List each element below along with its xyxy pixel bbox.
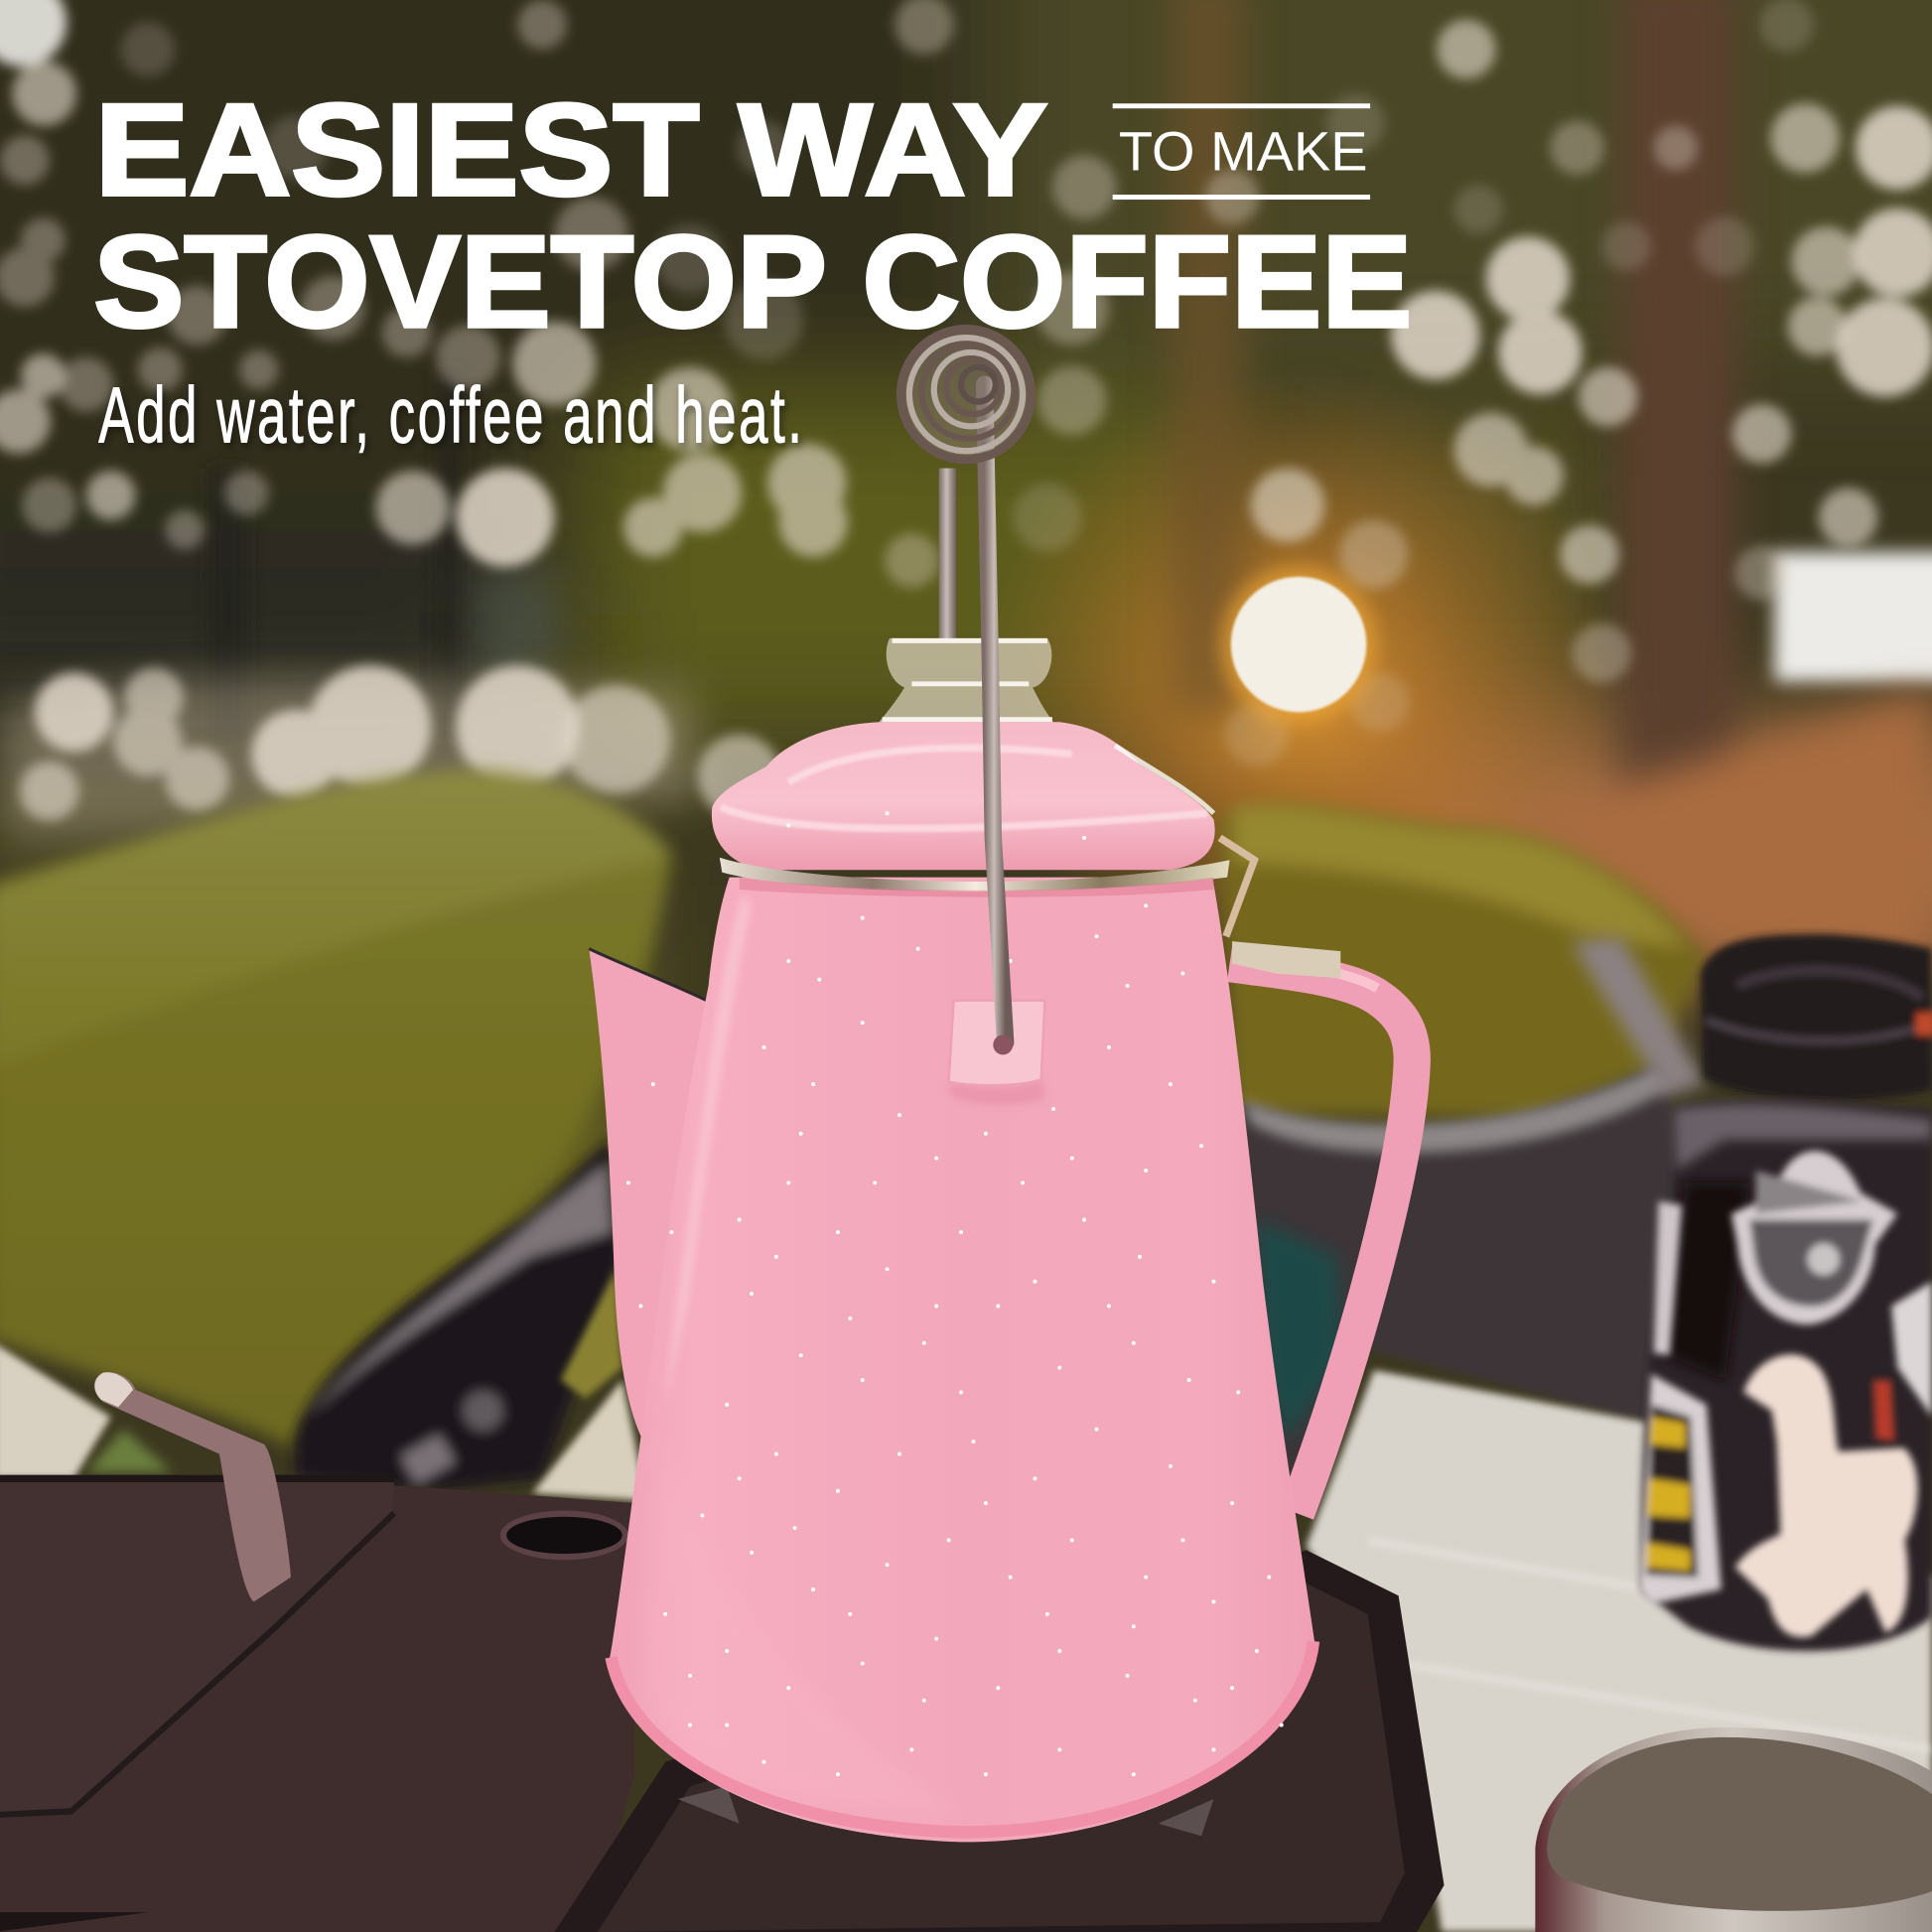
camp stove base xyxy=(0,1478,634,1932)
coffee percolator xyxy=(589,329,1412,1842)
bracket shadow xyxy=(949,1079,1044,1105)
table plank line xyxy=(1368,1540,1932,1749)
bottle lid xyxy=(1701,934,1932,1101)
to make tag: TO MAKE xyxy=(1119,119,1368,182)
dark bottle stripe xyxy=(1666,1182,1749,1380)
ground far right xyxy=(1528,690,1932,973)
ground patch lower left xyxy=(0,1343,111,1478)
handle xyxy=(1230,964,1412,1513)
burner tray xyxy=(554,1550,1445,1932)
hinge xyxy=(1220,838,1254,936)
sticker: side strip xyxy=(1654,1201,1682,1355)
teal patch behind pot xyxy=(1257,1220,1343,1442)
wire grip coil xyxy=(900,329,1032,460)
cushion rim xyxy=(1242,1066,1676,1153)
lid highlights xyxy=(721,748,1207,829)
wire handle xyxy=(985,384,1006,1042)
bracket rivet xyxy=(993,1035,1013,1054)
title line 2: STOVETOP COFFEE xyxy=(93,208,1412,354)
lever handle xyxy=(94,1372,291,1601)
ring shadow xyxy=(740,878,1213,897)
white opening at right xyxy=(1774,552,1932,681)
tent xyxy=(0,770,671,1453)
table top xyxy=(1307,1370,1932,1932)
small plant patch xyxy=(86,1430,173,1472)
spout rim xyxy=(589,949,717,1006)
sticker: yellow label xyxy=(1639,1374,1722,1604)
sticker: right edge xyxy=(1891,1282,1932,1417)
dark cushion xyxy=(1242,1062,1725,1553)
olive bag xyxy=(1220,807,1707,1119)
glass knob xyxy=(875,638,1057,727)
dark object behind pot xyxy=(293,1140,622,1491)
speckles xyxy=(628,813,1282,1774)
bottle body xyxy=(1641,1099,1932,1651)
handle highlight xyxy=(1232,959,1378,988)
bokeh light circles xyxy=(0,0,1932,821)
metal ring xyxy=(720,858,1230,892)
subtitle: Add water, coffee and heat. xyxy=(98,371,804,460)
ground patch by pot xyxy=(532,1380,647,1501)
pot base rim xyxy=(612,1641,1313,1832)
steel cup xyxy=(1535,1727,1932,1932)
sticker: alpaca xyxy=(1734,1354,1918,1637)
olive patch by pot xyxy=(561,1269,622,1399)
bokeh glow band xyxy=(0,676,702,838)
sun xyxy=(1220,566,1378,724)
to make tag xyxy=(1113,103,1370,200)
lid dome xyxy=(712,722,1215,870)
handle clasp xyxy=(1232,941,1340,978)
title line 1: EASIEST WAY xyxy=(95,76,1047,222)
spout xyxy=(589,949,717,1448)
grey strap xyxy=(1571,936,1707,1097)
lid edge highlight xyxy=(1115,746,1213,813)
bracket xyxy=(949,1001,1044,1085)
highlight left body xyxy=(665,894,752,1405)
pot body xyxy=(609,878,1315,1842)
sticker: bear badge xyxy=(1731,1151,1897,1324)
water bottle xyxy=(1639,934,1932,1651)
bottle shoulder highlight xyxy=(1673,1104,1932,1171)
back wire xyxy=(939,469,956,640)
title xyxy=(93,76,1412,354)
bag highlight xyxy=(1232,804,1688,949)
pot shading xyxy=(649,1417,961,1814)
